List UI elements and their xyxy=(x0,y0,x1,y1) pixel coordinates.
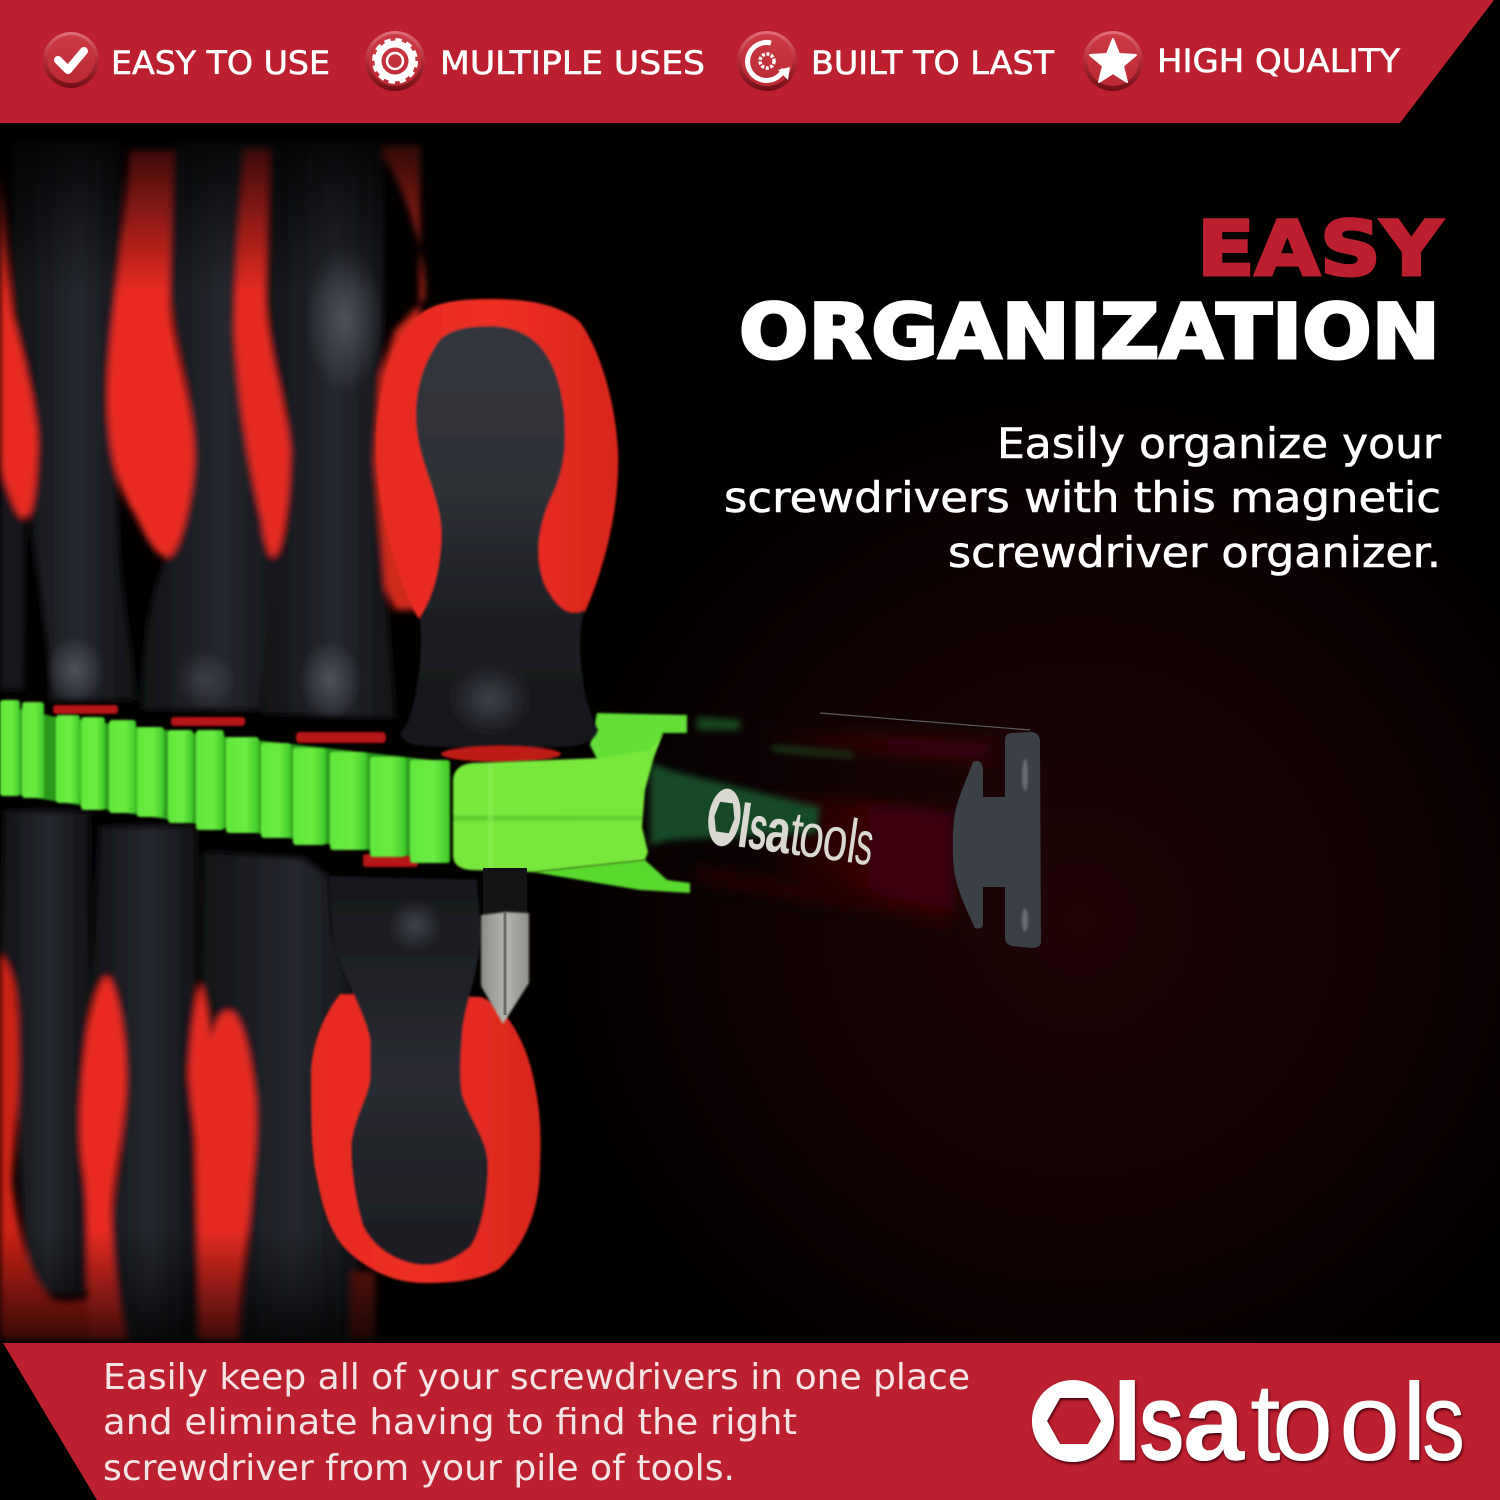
bottom banner xyxy=(3,1343,1500,1500)
Olsatools logo: o xyxy=(1272,1361,1333,1484)
main screwdriver, upper handle xyxy=(376,299,618,762)
description text: screwdriver organizer. xyxy=(948,528,1441,577)
end cap xyxy=(953,732,1041,948)
green organizer rail with ribs xyxy=(0,700,450,863)
magnetic rail body xyxy=(650,713,1041,948)
handle black grip xyxy=(400,326,598,747)
main screwdriver bit xyxy=(481,868,529,1024)
bottom fade over background handles xyxy=(0,1230,400,1343)
description text: Easily organize your xyxy=(997,419,1442,468)
Olsatools logo: a xyxy=(1183,1361,1245,1484)
rail logo: l xyxy=(734,792,756,862)
Olsatools logo: l xyxy=(1112,1361,1143,1484)
icon: gear xyxy=(365,31,425,91)
grip highlight xyxy=(448,662,532,738)
top banner xyxy=(0,0,1494,123)
red washers behind rail xyxy=(53,705,418,867)
footer text: screwdriver from your pile of tools. xyxy=(103,1448,735,1489)
Olsatools logo xyxy=(1032,1361,1465,1484)
Olsatools logo: l xyxy=(1402,1361,1426,1484)
icon: circular arrow xyxy=(737,31,797,91)
Olsatools logo: o xyxy=(1339,1361,1400,1484)
rail red reflections xyxy=(695,728,990,925)
rail logo: s xyxy=(851,808,878,879)
footer text xyxy=(103,1357,970,1489)
label: multiple uses: MULTIPLE USES xyxy=(440,44,705,82)
handle red overmold xyxy=(376,299,618,618)
top fade over background handles xyxy=(0,123,440,293)
footer text: Easily keep all of your screwdrivers in one place xyxy=(103,1357,970,1398)
description text xyxy=(724,419,1442,577)
icon: star xyxy=(1083,31,1143,91)
blurred screwdrivers, lower row xyxy=(0,810,375,1340)
green clip back and horns xyxy=(533,713,690,893)
heading xyxy=(739,204,1443,376)
rail logo: s xyxy=(744,793,773,864)
icon: check xyxy=(43,32,99,88)
rail logo xyxy=(703,787,878,879)
rail logo: o xyxy=(819,804,853,875)
rail logo: t xyxy=(786,799,808,869)
Olsatools logo: t xyxy=(1250,1361,1281,1484)
rail logo: o xyxy=(795,800,829,872)
rail logo: a xyxy=(762,796,796,867)
main screwdriver, lower handle xyxy=(311,876,541,1283)
red washer xyxy=(441,746,561,762)
rail logo: l xyxy=(843,807,862,877)
Olsatools logo: s xyxy=(1422,1361,1465,1484)
rail green reflection xyxy=(650,717,853,845)
label: high quality: HIGH QUALITY xyxy=(1157,42,1400,80)
rail top highlight xyxy=(820,713,1030,730)
Olsatools logo: s xyxy=(1138,1361,1185,1484)
blurred screwdrivers, upper row xyxy=(0,140,424,720)
label: built to last: BUILT TO LAST xyxy=(811,44,1054,82)
description text: screwdrivers with this magnetic xyxy=(724,473,1441,522)
label: easy to use: EASY TO USE xyxy=(111,44,330,82)
footer text: and eliminate having to find the right xyxy=(103,1402,797,1443)
heading: EASY xyxy=(1197,204,1443,293)
heading: ORGANIZATION xyxy=(739,287,1440,376)
green clip front face xyxy=(453,733,663,872)
